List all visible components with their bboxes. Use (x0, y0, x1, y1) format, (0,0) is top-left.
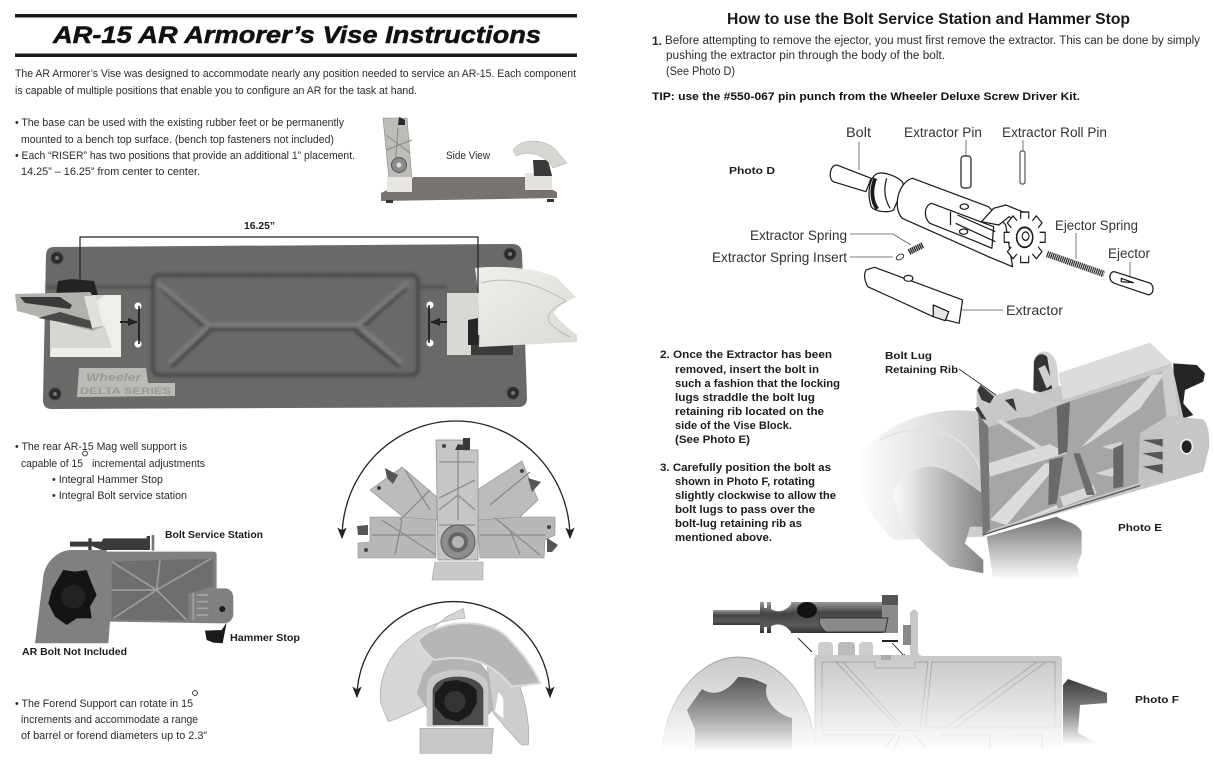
text block: forend support bullet: of barrel or forend diameters up to 2.3” (21, 730, 207, 742)
text block: base and riser bullets (15, 117, 355, 178)
nameplate (77, 368, 175, 397)
text block: base and riser bullets: mounted to a bench top surface. (bench top fasteners not included) (21, 134, 334, 146)
position arrows (120, 321, 447, 323)
photo: side view of vise (381, 117, 567, 203)
bolt (713, 595, 898, 642)
text block: steps 2 and 3: bolt-lug retaining rib as (675, 518, 802, 530)
text block: base and riser bullets: • The base can be used with the existing rubber feet or be permanently (15, 117, 344, 129)
text block: steps 2 and 3: side of the Vise Block. (675, 420, 792, 432)
bolt on top (70, 536, 150, 550)
riser position slots (134, 302, 434, 348)
text block: mag well support bullets (15, 441, 205, 502)
label: bolt lug retaining rib (885, 350, 996, 395)
text block: forend support bullet: increments and accommodate a range (21, 714, 198, 726)
text block: step 1 (652, 34, 1200, 78)
ejector (1110, 272, 1153, 295)
base (420, 728, 493, 753)
label: bolt lug retaining rib: Retaining Rib (885, 364, 958, 376)
part labels: Extractor Spring Insert (712, 250, 847, 265)
intro text block: is capable of multiple positions that enable you to configure an AR for the task at hand. (15, 85, 417, 97)
label: 16.25 inch dimension: 16.25” (244, 220, 275, 232)
front lugs (982, 205, 1026, 225)
photo F: bolt placement over vise block (662, 595, 1107, 752)
text block: forend support bullet: • The Forend Support can rotate in 15 (15, 698, 193, 710)
frame lines (815, 658, 1055, 750)
text block: steps 2 and 3: lugs straddle the bolt lug (675, 392, 815, 404)
black hammer stop (1173, 363, 1205, 418)
text block: step 1: Before attempting to remove the ejector, you must first remove the extractor. This can be done by simply (665, 35, 1200, 47)
step stack (1140, 430, 1163, 486)
text block: steps 2 and 3: such a fashion that the locking (675, 378, 840, 390)
dark rib walls (1057, 402, 1070, 455)
tip text: TIP: use the #550-067 pin punch from the Wheeler Deluxe Screw Driver Kit. (652, 91, 1080, 103)
photo: mag well support rotation positions (342, 421, 570, 580)
part labels: Ejector Spring (1055, 218, 1138, 233)
text block: steps 2 and 3 (660, 349, 840, 544)
part labels: Extractor Spring (750, 228, 847, 243)
text block: steps 2 and 3: 2. Once the Extractor has been (660, 349, 832, 361)
nameplate: Wheeler (86, 372, 142, 384)
part labels: Extractor Roll Pin (1002, 125, 1107, 140)
text block: mag well support bullets: incremental adjustments (92, 458, 205, 470)
intro text block: The AR Armorer’s Vise was designed to accommodate nearly any position needed to service an AR-15. Each component (15, 68, 576, 80)
nameplate: DELTA SERIES (80, 386, 171, 396)
text block: steps 2 and 3: 3. Carefully position the bolt as (660, 462, 831, 474)
rib pockets (988, 372, 1167, 530)
label: photo D: Photo D (729, 165, 775, 177)
label: photo F: Photo F (1135, 694, 1180, 706)
hammer stop (205, 623, 227, 643)
label: hammer stop: Hammer Stop (230, 632, 300, 644)
leader lines (850, 140, 1130, 310)
housing (35, 550, 233, 643)
text block: mag well support bullets: • Integral Bolt service station (52, 490, 187, 502)
part labels: Extractor (1006, 303, 1064, 318)
label: bolt service station: Bolt Service Station (165, 529, 263, 541)
hammer stop (1063, 679, 1107, 745)
text block: step 1: 1. (652, 34, 662, 48)
text block: steps 2 and 3: slightly clockwise to allow the (675, 490, 836, 502)
photo: forend support rotation (357, 602, 550, 753)
label: AR bolt not included: AR Bolt Not Included (22, 646, 127, 658)
text block: steps 2 and 3: shown in Photo F, rotating (675, 476, 815, 488)
text block: base and riser bullets: • Each “RISER” has two positions that provide an additional 1” placement. (15, 150, 355, 162)
photo: bolt service station side (35, 535, 233, 643)
part labels: Extractor Pin (904, 125, 982, 140)
text block: base and riser bullets: 14.25” – 16.25” from center to center. (21, 166, 200, 178)
ejector spring (1047, 254, 1104, 274)
top band (418, 623, 540, 687)
heading: vise instructions title with rules (15, 14, 577, 57)
text block: step 1: (See Photo D) (666, 66, 735, 78)
bolt parts (830, 165, 1153, 323)
main block (978, 343, 1209, 535)
screws (49, 248, 519, 400)
text block: steps 2 and 3: mentioned above. (675, 532, 772, 544)
embossed recess and ribs (46, 275, 447, 375)
photo E: vise block with bolt lug retaining rib (853, 343, 1209, 579)
extractor spring insert (895, 253, 905, 261)
intro text block (15, 68, 576, 97)
roll pin (1020, 151, 1025, 184)
exploded bolt diagram with part labels (712, 125, 1153, 323)
photo: vise top view on textured base plate (15, 237, 577, 409)
heading: bolt service station and hammer stop: How to use the Bolt Service Station and Hammer Stop (727, 11, 1130, 28)
text block: mag well support bullets: capable of 15 (21, 458, 83, 470)
arrows to lugs (798, 638, 906, 658)
gear head (1004, 212, 1045, 263)
text block: mag well support bullets: • The rear AR-15 Mag well support is (15, 441, 187, 453)
text block: forend support bullet (15, 691, 207, 742)
text block: steps 2 and 3: retaining rib located on the (675, 406, 824, 418)
inner shaded ring (417, 658, 497, 720)
part labels: Bolt (846, 125, 871, 140)
left riser (15, 279, 121, 357)
text block: mag well support bullets: • Integral Hammer Stop (52, 474, 163, 486)
ear (1033, 351, 1061, 402)
extractor pin (961, 156, 971, 188)
dimension bracket (80, 237, 478, 293)
right riser and forend support (447, 267, 577, 355)
text block: steps 2 and 3: removed, insert the bolt in (675, 364, 819, 376)
faded hub and stem (853, 410, 985, 540)
part labels: Ejector (1108, 246, 1150, 261)
label: photo E: Photo E (1118, 522, 1162, 534)
base plate (43, 244, 527, 409)
left ring (380, 608, 465, 722)
lugs (818, 642, 891, 660)
extractor spring (909, 245, 923, 252)
heading: vise instructions title with rules: AR-15 AR Armorer’s Vise Instructions (52, 22, 541, 49)
label: bolt lug retaining rib: Bolt Lug (885, 350, 932, 362)
text block: steps 2 and 3: (See Photo E) (675, 434, 750, 446)
u block (427, 670, 488, 727)
extractor (865, 267, 963, 323)
text block: step 1: pushing the extractor pin through the body of the bolt. (666, 50, 945, 62)
part labels (712, 125, 1150, 318)
text block: steps 2 and 3: bolt lugs to pass over the (675, 504, 815, 516)
round hub (662, 657, 815, 752)
lugs (977, 387, 1058, 423)
right flap (487, 662, 540, 745)
block body with post (815, 610, 1062, 752)
label: side view: Side View (446, 150, 490, 162)
